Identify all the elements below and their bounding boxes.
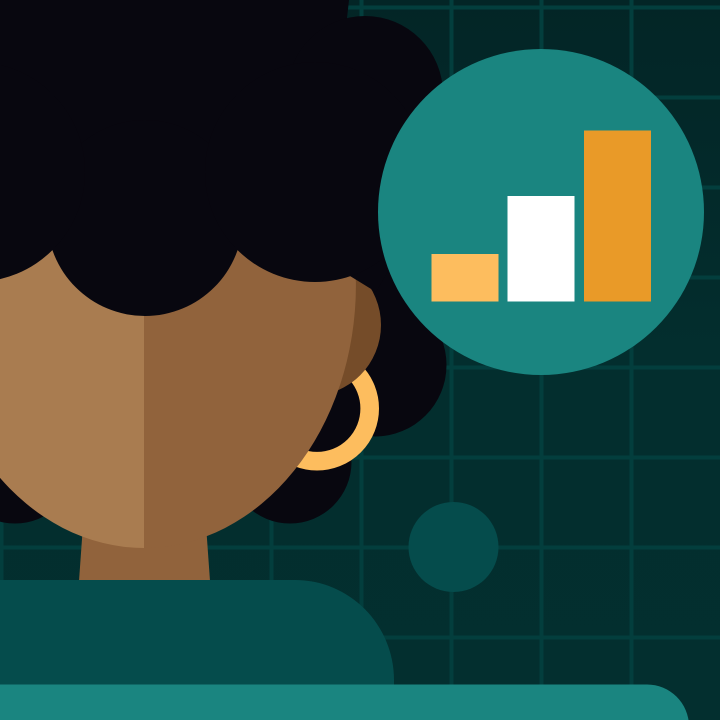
earring xyxy=(264,356,370,461)
hair: front xyxy=(0,0,443,316)
ear xyxy=(239,254,381,396)
hair: back curls xyxy=(0,230,446,524)
shirt xyxy=(0,580,394,720)
bar: tall xyxy=(584,130,651,302)
bar: medium xyxy=(508,196,574,302)
face: lit half xyxy=(0,22,144,548)
bar: small xyxy=(432,254,498,302)
face: shaded half xyxy=(144,22,356,548)
decorative circle xyxy=(408,502,498,592)
laptop / foreground bar xyxy=(0,684,689,720)
badge circle xyxy=(378,49,704,375)
face xyxy=(0,22,356,548)
chart badge xyxy=(378,49,704,375)
neck xyxy=(79,525,210,581)
